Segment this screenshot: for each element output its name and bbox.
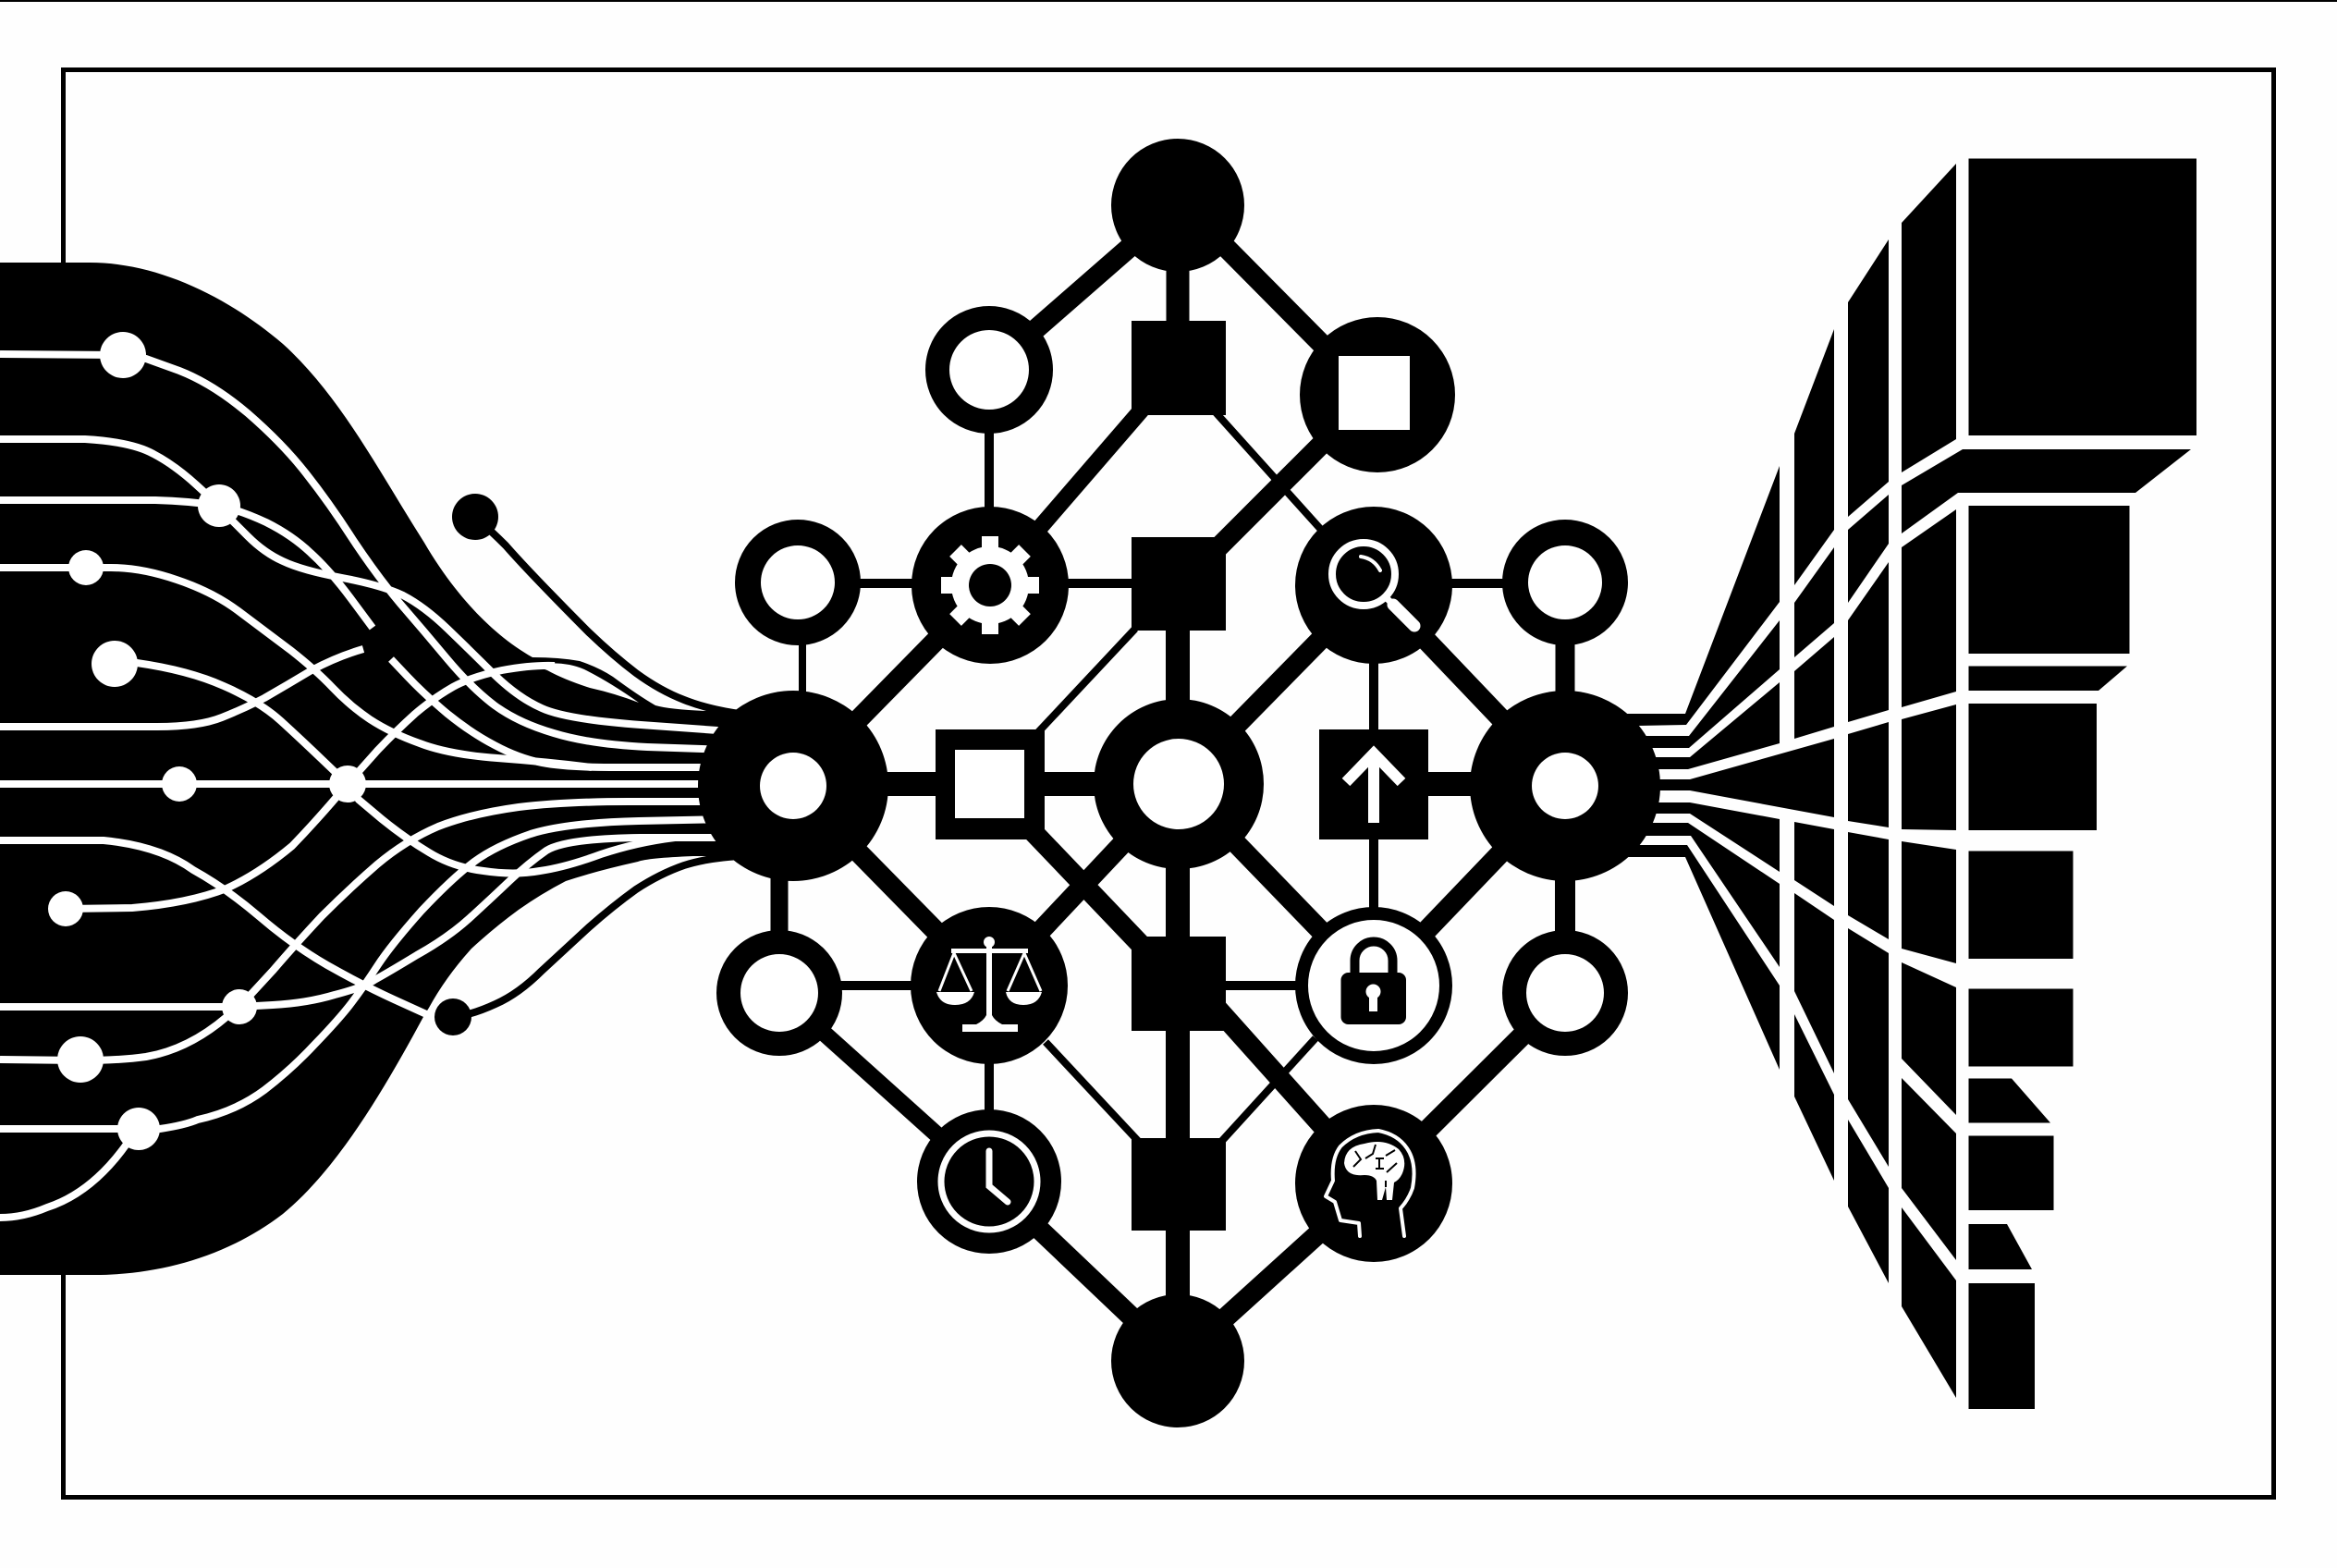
node: lower-right ring <box>1514 942 1616 1044</box>
fan column 1 <box>1618 466 1834 1070</box>
white sliver at upper edge <box>532 663 639 703</box>
fan column 3 <box>1848 239 1889 1283</box>
black stray strand, upper <box>452 494 740 714</box>
node: right hub <box>1470 691 1660 881</box>
white input nodes <box>48 332 366 1150</box>
right fan: perspective grid of blocks <box>1618 159 2196 1409</box>
node: upper-left ring <box>937 318 1041 422</box>
node: top black circle <box>1111 139 1244 272</box>
node: black square 3 <box>1132 937 1226 1031</box>
output blocks <box>1969 159 2196 1409</box>
node: left hub <box>698 691 888 881</box>
icon: head with brain <box>1295 1105 1452 1262</box>
node: left ring <box>748 533 848 632</box>
icon: gear <box>912 507 1069 664</box>
icon: magnifying glass <box>1295 507 1452 664</box>
left funnel: tangled input lines <box>0 263 740 1275</box>
icon: clock <box>917 1109 1061 1254</box>
node: square with up arrow <box>1319 729 1428 839</box>
icon: scales of justice <box>911 907 1068 1064</box>
icon: padlock <box>1302 913 1446 1058</box>
node: lower-left ring <box>728 942 830 1044</box>
node: right ring <box>1515 533 1615 632</box>
white signal lines <box>0 354 730 1218</box>
node: upper-right circle with square <box>1300 317 1455 472</box>
node: bottom black circle <box>1111 1294 1244 1427</box>
node: black square 2 <box>1132 537 1226 631</box>
node: outlined square <box>936 729 1045 839</box>
network connectors <box>779 199 1565 1361</box>
node: black square 1 <box>1132 321 1226 415</box>
fan column 2 <box>1794 329 1834 1181</box>
fan column 4 <box>1902 164 2191 1398</box>
black stray strand, lower <box>434 856 740 1035</box>
funnel body <box>0 263 740 1275</box>
node: black square 4 <box>1132 1138 1226 1231</box>
node: centre hub <box>1094 699 1264 869</box>
